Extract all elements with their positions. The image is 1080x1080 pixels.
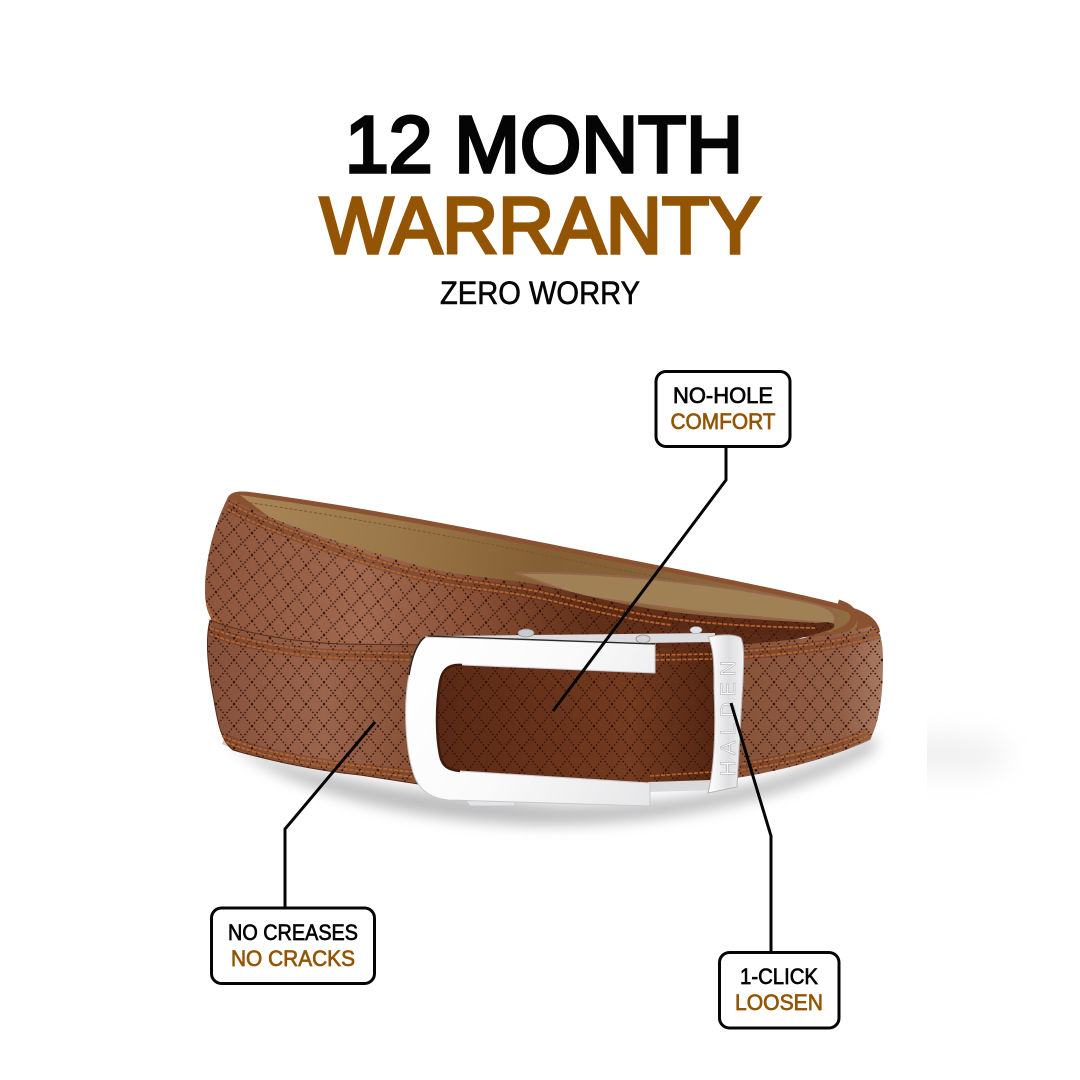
lower belt band left bbox=[207, 620, 425, 785]
keeper with HALDEN engraving: HALDEN bbox=[717, 661, 740, 776]
label box: NO CRACKS bbox=[231, 946, 355, 971]
back loop inner lining bbox=[228, 492, 880, 640]
label box: NO-HOLE bbox=[673, 383, 773, 408]
buckle pins and rear bar bbox=[440, 626, 715, 806]
lower belt band right bbox=[736, 626, 883, 778]
callout: 1-click loosen bbox=[720, 703, 839, 1028]
label box: 1-CLICK bbox=[740, 964, 818, 989]
belt illustration bbox=[205, 492, 1010, 825]
upper belt band bbox=[205, 497, 834, 660]
label box bbox=[720, 952, 839, 1028]
label box: LOOSEN bbox=[735, 990, 823, 1015]
ground shadow bbox=[225, 735, 1010, 825]
subtitle: ZERO WORRY: ZERO WORRY bbox=[440, 275, 640, 311]
title: 12 MONTH: 12 MONTH bbox=[345, 100, 743, 189]
callout: no creases no cracks bbox=[212, 722, 375, 984]
silver buckle frame bbox=[406, 636, 655, 806]
label box: NO CREASES bbox=[228, 920, 358, 945]
leader line bbox=[731, 703, 771, 952]
centre belt section bbox=[430, 648, 716, 785]
keeper with HALDEN engraving bbox=[708, 635, 744, 793]
leader line bbox=[285, 722, 375, 908]
label box bbox=[656, 372, 790, 446]
leader line bbox=[553, 447, 726, 711]
title: WARRANTY: WARRANTY bbox=[320, 181, 761, 270]
label box bbox=[212, 908, 374, 984]
label box: COMFORT bbox=[670, 409, 776, 434]
callout: no-hole comfort bbox=[553, 372, 790, 711]
